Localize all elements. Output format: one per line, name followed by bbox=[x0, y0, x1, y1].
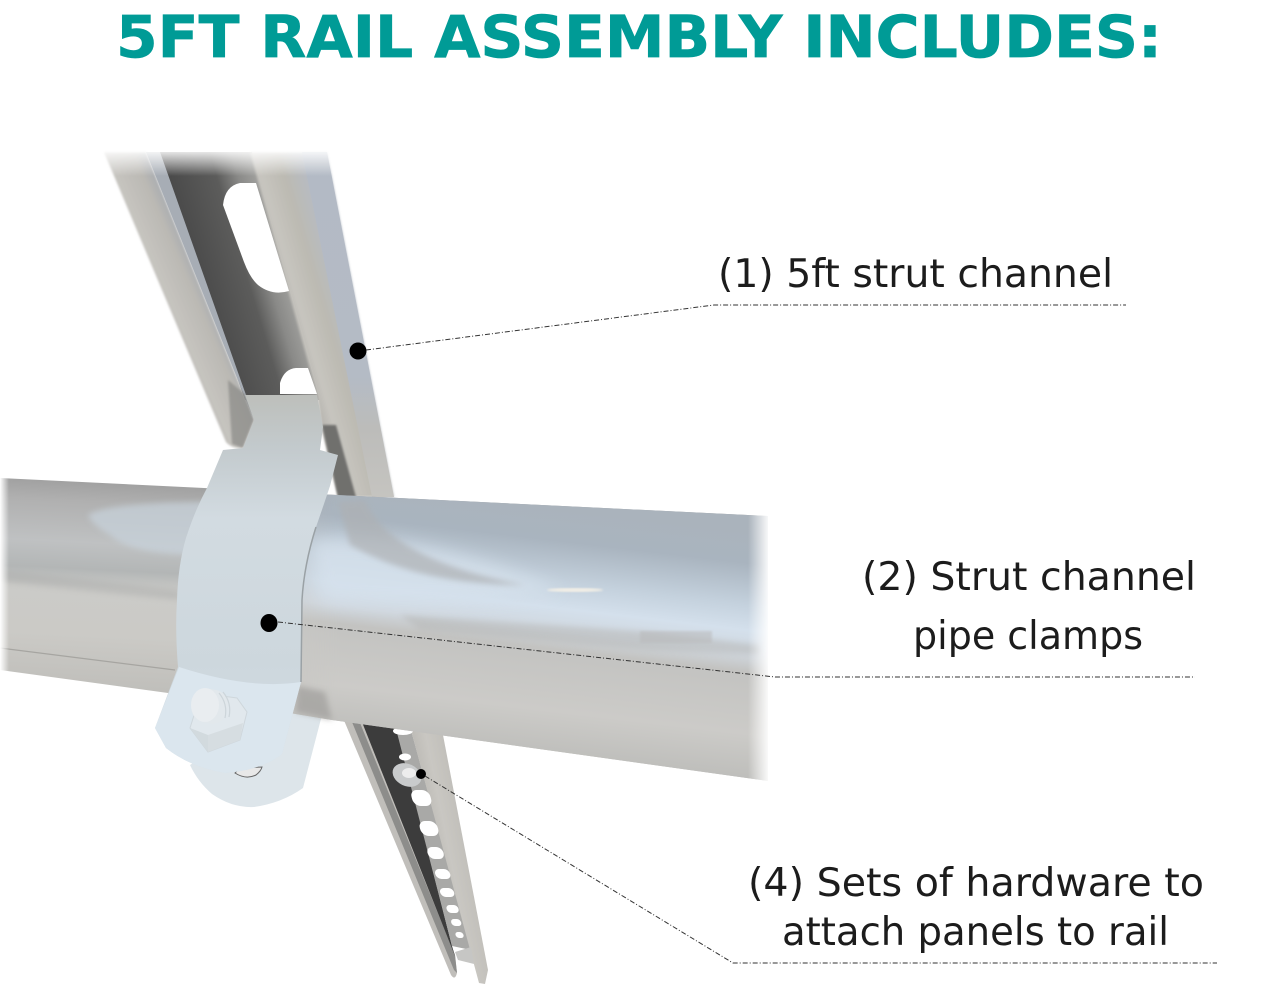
channel slots bbox=[393, 727, 464, 938]
lower strut channel bbox=[343, 718, 488, 984]
marker dot bbox=[416, 769, 426, 779]
illustration: strut channel and pipe clamp on a pipe bbox=[0, 148, 770, 984]
label: (2) Strut channel bbox=[862, 555, 1196, 600]
leader line bbox=[425, 776, 1217, 963]
callout: 5ft strut channel bbox=[350, 252, 1126, 360]
upper strut channel bbox=[95, 148, 394, 497]
leader line bbox=[278, 622, 1195, 677]
label: attach panels to rail bbox=[782, 910, 1169, 955]
marker dot bbox=[350, 342, 366, 360]
leader line bbox=[366, 305, 1126, 350]
callout: hardware sets bbox=[416, 769, 1217, 963]
bolt underside bbox=[235, 767, 262, 777]
pipe bbox=[0, 470, 770, 790]
label bbox=[862, 555, 1196, 659]
label: (4) Sets of hardware to bbox=[748, 861, 1204, 906]
pipe reflections bbox=[0, 500, 760, 720]
callout: strut channel pipe clamps bbox=[260, 555, 1196, 677]
hex nut and bolt bbox=[189, 686, 247, 752]
label: (1) 5ft strut channel bbox=[718, 252, 1113, 297]
hardware washer bbox=[389, 754, 425, 791]
title: 5FT RAIL ASSEMBLY INCLUDES: bbox=[116, 3, 1162, 71]
clamp rear flange bbox=[190, 700, 322, 807]
pipe clamp bbox=[155, 395, 338, 773]
label: pipe clamps bbox=[913, 614, 1143, 659]
marker dot bbox=[260, 614, 278, 632]
label bbox=[748, 861, 1204, 955]
channel slots bbox=[223, 183, 317, 394]
